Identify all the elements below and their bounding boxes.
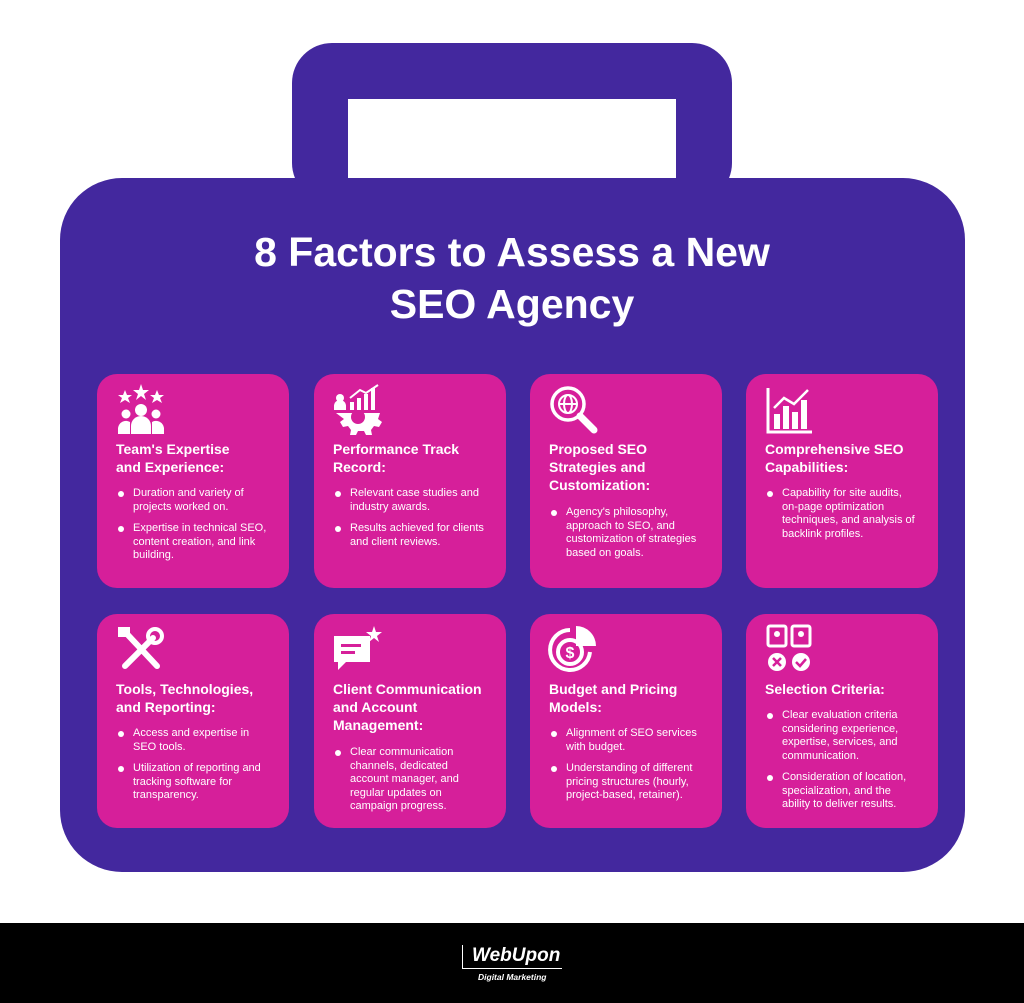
bullets bbox=[767, 487, 915, 540]
bullets bbox=[767, 709, 906, 810]
icon: pie dollar: $ bbox=[566, 645, 575, 662]
bullets: Understanding of different bbox=[566, 762, 692, 774]
bullets: Alignment of SEO services bbox=[566, 727, 697, 739]
heading: Proposed SEO bbox=[549, 441, 647, 457]
bullets: Clear communication bbox=[350, 746, 453, 758]
card 8 bbox=[746, 614, 938, 828]
heading bbox=[116, 681, 253, 715]
card 7 bbox=[530, 614, 722, 828]
bullets bbox=[118, 727, 261, 801]
icon: team stars bbox=[118, 384, 164, 434]
heading: Capabilities: bbox=[765, 459, 848, 475]
card 5 bbox=[97, 614, 289, 828]
bullets: Consideration of location, bbox=[782, 771, 906, 783]
briefcase body bbox=[60, 178, 965, 872]
bullets: on-page optimization bbox=[782, 500, 884, 512]
bullets: Results achieved for clients bbox=[350, 522, 484, 534]
bullets: building. bbox=[133, 549, 174, 561]
bullets: with budget. bbox=[566, 740, 625, 752]
footer bar bbox=[0, 923, 1024, 1003]
heading: Budget and Pricing bbox=[549, 681, 677, 697]
heading: Team's Expertise bbox=[116, 441, 230, 457]
heading bbox=[333, 441, 459, 475]
bullets bbox=[335, 746, 459, 812]
bullets: customization of strategies bbox=[566, 533, 696, 545]
heading: Performance Track bbox=[333, 441, 459, 457]
heading: Customization: bbox=[549, 477, 650, 493]
bullets: campaign progress. bbox=[350, 800, 447, 812]
bullets: ability to deliver results. bbox=[782, 798, 896, 810]
icon: pie dollar bbox=[548, 626, 596, 672]
bullets: SEO tools. bbox=[133, 740, 186, 752]
bullets: specialization, and the bbox=[782, 784, 891, 796]
card 4 bbox=[746, 374, 938, 588]
bullets bbox=[551, 727, 697, 801]
title bbox=[254, 229, 770, 327]
bullets: based on goals. bbox=[566, 546, 644, 558]
bullets: pricing structures (hourly, bbox=[566, 776, 689, 788]
heading: Models: bbox=[549, 699, 602, 715]
heading bbox=[116, 441, 230, 475]
bullets: content creation, and link bbox=[133, 536, 255, 548]
heading bbox=[549, 681, 677, 715]
bullets: Agency's philosophy, bbox=[566, 506, 668, 518]
heading: Comprehensive SEO bbox=[765, 441, 904, 457]
title: SEO Agency bbox=[390, 281, 634, 327]
briefcase handle bbox=[292, 43, 732, 203]
bullets: account manager, and bbox=[350, 773, 459, 785]
heading: and Reporting: bbox=[116, 699, 216, 715]
bullets: backlink profiles. bbox=[782, 528, 863, 540]
card 6 bbox=[314, 614, 506, 828]
logo bbox=[462, 945, 562, 982]
heading: and Experience: bbox=[116, 459, 224, 475]
bullets: Clear evaluation criteria bbox=[782, 709, 898, 721]
bullets: techniques, and analysis of bbox=[782, 514, 915, 526]
heading bbox=[333, 681, 482, 733]
bullets: transparency. bbox=[133, 789, 199, 801]
heading: Selection Criteria: bbox=[765, 681, 885, 697]
heading bbox=[549, 441, 650, 493]
bullets: projects worked on. bbox=[133, 500, 228, 512]
title: 8 Factors to Assess a New bbox=[254, 229, 770, 275]
heading: Strategies and bbox=[549, 459, 645, 475]
icon: tools bbox=[118, 627, 164, 669]
card 2 bbox=[314, 374, 506, 588]
bullets: Utilization of reporting and bbox=[133, 762, 261, 774]
logo: Digital Marketing bbox=[478, 972, 546, 982]
heading: Record: bbox=[333, 459, 386, 475]
bullets: regular updates on bbox=[350, 786, 442, 798]
bullets: Relevant case studies and bbox=[350, 487, 479, 499]
icon: search globe bbox=[550, 386, 598, 434]
heading: Management: bbox=[333, 717, 423, 733]
card 1 bbox=[97, 374, 289, 588]
bullets: considering experience, bbox=[782, 722, 898, 734]
card 3 bbox=[530, 374, 722, 588]
bullets: Duration and variety of bbox=[133, 487, 244, 499]
bullets: communication. bbox=[782, 750, 859, 762]
heading: and Account bbox=[333, 699, 417, 715]
bullets: approach to SEO, and bbox=[566, 520, 675, 532]
icon: performance gear bbox=[334, 384, 382, 435]
bullets bbox=[551, 506, 696, 558]
bullets: project-based, retainer). bbox=[566, 789, 683, 801]
logo: WebUpon bbox=[472, 945, 560, 966]
bullets: Expertise in technical SEO, bbox=[133, 522, 266, 534]
icon: selection bbox=[766, 624, 812, 671]
bullets: Access and expertise in bbox=[133, 727, 249, 739]
icon: chart bbox=[766, 388, 812, 434]
bullets: channels, dedicated bbox=[350, 760, 448, 772]
bullets: expertise, services, and bbox=[782, 736, 898, 748]
heading bbox=[765, 441, 904, 475]
bullets: tracking software for bbox=[133, 776, 232, 788]
icon: chat star bbox=[334, 626, 382, 670]
heading: Tools, Technologies, bbox=[116, 681, 253, 697]
heading: Client Communication bbox=[333, 681, 482, 697]
bullets: industry awards. bbox=[350, 500, 430, 512]
bullets bbox=[118, 487, 266, 561]
handle hole bbox=[348, 99, 676, 178]
bullets bbox=[335, 487, 484, 548]
bullets: and client reviews. bbox=[350, 536, 440, 548]
bullets: Capability for site audits, bbox=[782, 487, 902, 499]
